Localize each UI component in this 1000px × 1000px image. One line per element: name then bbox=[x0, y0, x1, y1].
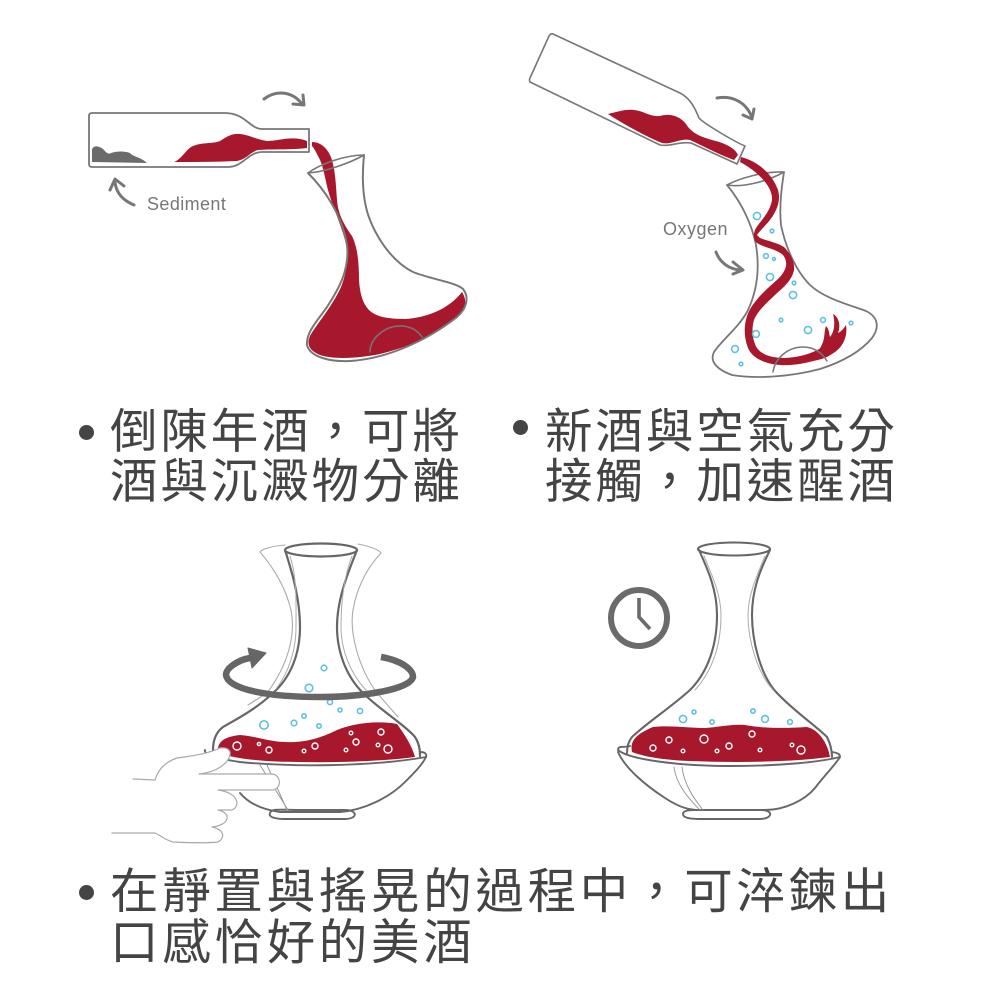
text: resting and swirling: 口感恰好的美酒 bbox=[110, 916, 475, 970]
arrow: bottle tilt bbox=[717, 97, 754, 119]
text: resting and swirling bbox=[110, 865, 893, 970]
text: resting and swirling: 在靜置與搖晃的過程中，可淬鍊出 bbox=[110, 865, 893, 919]
text: decant aged wine: 倒陳年酒，可將 bbox=[110, 406, 463, 459]
bottle: tilted bbox=[530, 34, 745, 164]
ghost decanters bbox=[248, 544, 398, 717]
wine stream and pool bbox=[308, 142, 465, 358]
text: aerate young wine: 新酒與空氣充分 bbox=[545, 406, 898, 459]
illustration: pouring aged wine with sediment bbox=[89, 93, 467, 361]
wine bbox=[218, 722, 415, 762]
bubbles: white in wine bbox=[233, 729, 392, 753]
illustration: swirling decanter bbox=[112, 544, 426, 843]
base dome bbox=[773, 347, 827, 372]
arrow: bottle tilt bbox=[264, 93, 304, 105]
decanter: resting bbox=[627, 542, 832, 757]
text: aerate young wine bbox=[545, 406, 898, 509]
decanter: tilted bbox=[307, 155, 467, 361]
text: decant aged wine bbox=[110, 406, 463, 509]
bottle: horizontal with sediment bbox=[89, 113, 309, 167]
bubbles: blue bbox=[260, 665, 363, 729]
text: decant aged wine: 酒與沉澱物分離 bbox=[110, 456, 463, 509]
wine ribbon bbox=[740, 157, 846, 365]
hand bbox=[112, 748, 279, 843]
wine bbox=[632, 725, 830, 762]
arrow: sediment bbox=[110, 179, 134, 205]
bullet bbox=[79, 425, 94, 440]
icon: clock bbox=[611, 590, 667, 646]
wine in bottle bbox=[608, 110, 738, 160]
illustration: resting decanter with clock bbox=[611, 542, 840, 819]
decanter: tilted with oxygen bbox=[713, 172, 877, 377]
arrow: oxygen bbox=[716, 252, 743, 274]
bubbles: white in wine bbox=[650, 731, 805, 754]
label: Sediment: Sediment bbox=[147, 194, 226, 214]
bubbles: oxygen bbox=[732, 212, 853, 366]
bullet bbox=[79, 885, 94, 900]
text: aerate young wine: 接觸，加速醒酒 bbox=[545, 456, 898, 509]
bowl bbox=[205, 750, 426, 819]
decanter: swirling bbox=[213, 544, 420, 756]
bowl bbox=[618, 746, 840, 819]
label: Oxygen: Oxygen bbox=[663, 219, 728, 239]
illustration: pouring young wine with oxygen bbox=[530, 34, 877, 377]
bullet bbox=[513, 420, 528, 435]
arrow: swirl rotation bbox=[226, 648, 413, 697]
bubbles: blue bbox=[679, 709, 792, 724]
